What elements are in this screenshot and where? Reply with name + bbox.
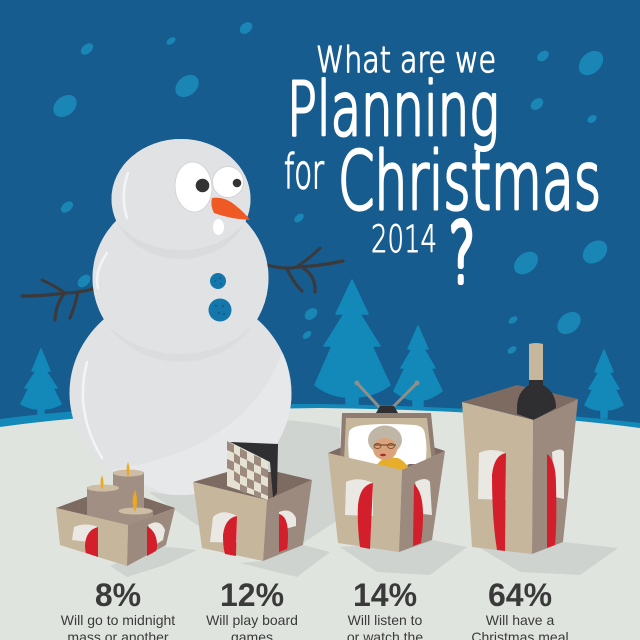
tv set (340, 413, 436, 464)
middle candle (87, 475, 119, 523)
statistic: 12%: 12% (220, 577, 284, 613)
button one (210, 273, 226, 289)
statistic: 8%: Will go to midnight (61, 612, 175, 628)
television gift box (328, 380, 445, 552)
right eye (212, 166, 244, 198)
ribbon (72, 522, 165, 557)
snowflakes (49, 20, 612, 355)
statistic: 8%: 8% (95, 577, 141, 613)
snowman base (70, 319, 292, 495)
title line: Planning: Planning (287, 67, 499, 153)
title (284, 40, 601, 302)
statistic: 14% (347, 577, 423, 640)
wine bottle (517, 343, 556, 420)
statistic: 14%: Will listen to (348, 612, 423, 628)
button two (208, 298, 232, 322)
snowman right arm (267, 248, 343, 292)
statistic: 12%: Will play board (206, 612, 298, 628)
ribbon (478, 450, 564, 551)
box shadows (110, 540, 618, 577)
left eye (173, 161, 214, 213)
statistic: 8% (61, 577, 175, 640)
pine trees (21, 280, 623, 418)
title word: for: for (284, 145, 324, 200)
candles gift box (56, 462, 175, 566)
title question mark: ? (449, 207, 475, 302)
statistic: 64%: 64% (488, 577, 552, 613)
snowman body (92, 220, 268, 320)
statistic: 12% (206, 577, 298, 640)
ground (0, 404, 640, 640)
ribbon (345, 479, 432, 549)
snowman (22, 130, 343, 500)
board game gift box (193, 441, 312, 561)
tv antenna (354, 380, 420, 413)
snowman head (112, 139, 250, 235)
ribbon (210, 510, 296, 556)
shadow of snowman (150, 420, 340, 545)
statistic: 64%: Will have a (486, 612, 554, 628)
grandmother on tv (368, 426, 410, 470)
front candle (118, 490, 153, 525)
statistic: 14%: 14% (353, 577, 417, 613)
back candle (113, 462, 144, 522)
title year: 2014: 2014 (371, 218, 437, 261)
statistic: 64% (471, 577, 569, 640)
chess board book (227, 441, 278, 500)
tooth (213, 219, 224, 235)
snowman left arm (22, 276, 126, 320)
wine bottle gift box (462, 343, 578, 554)
title line: What are we: What are we (316, 40, 496, 81)
carrot nose (211, 198, 250, 220)
